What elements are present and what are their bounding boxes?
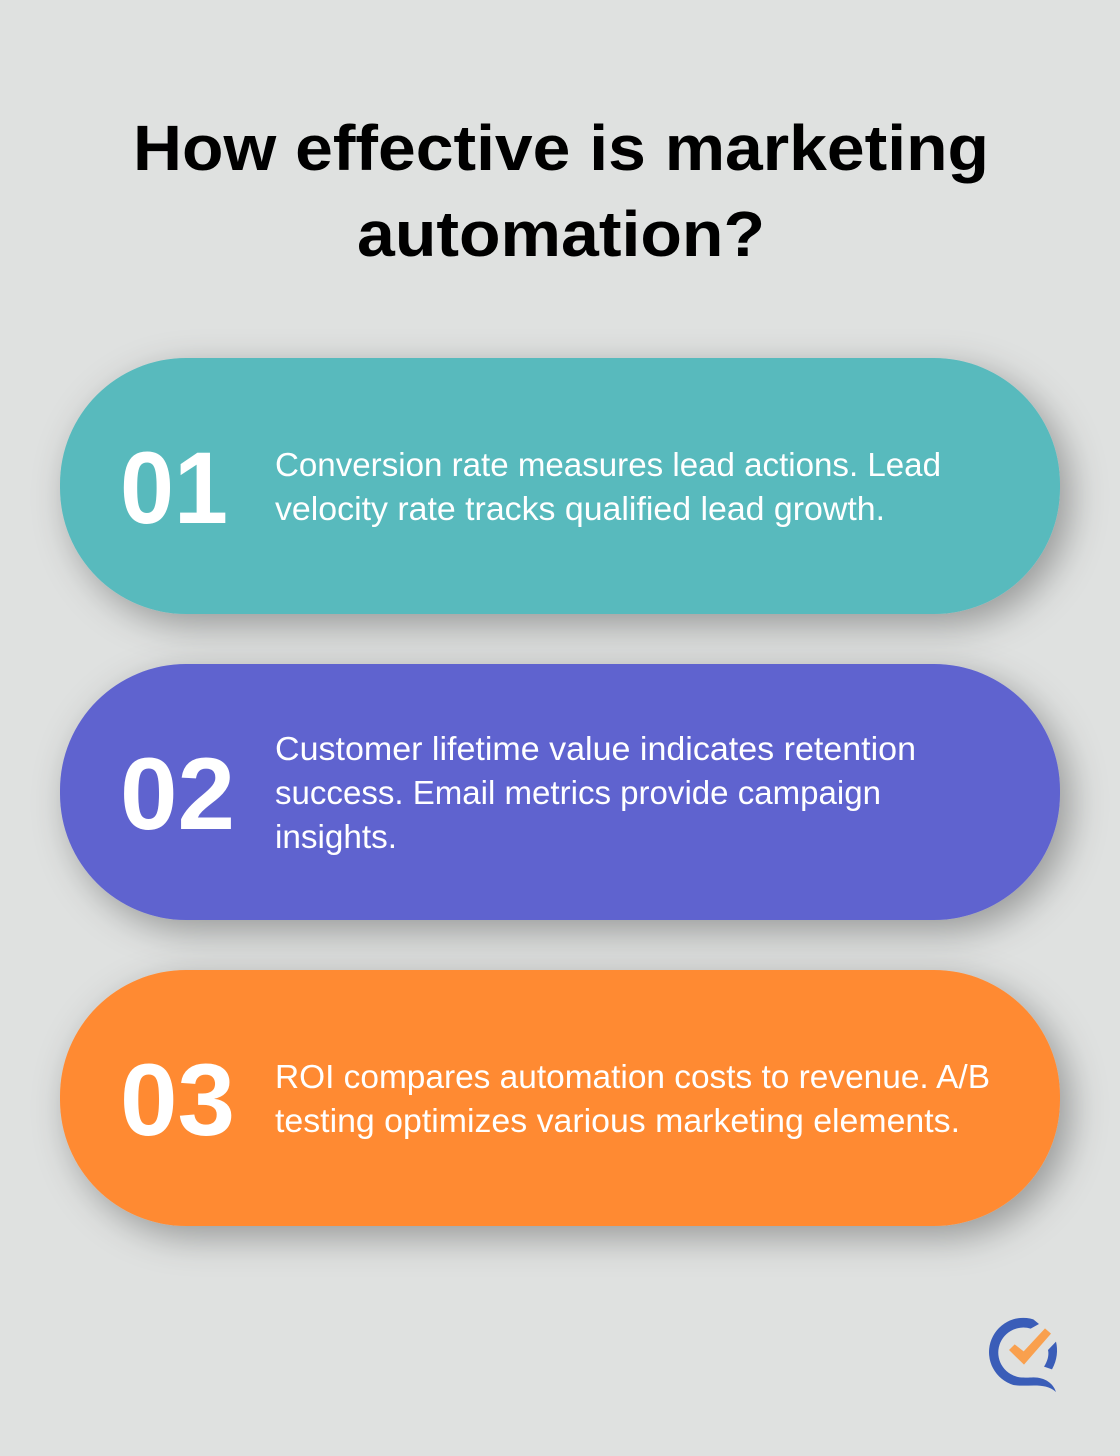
text: step 01 description: Conversion rate measures lead actions. Lead [275,446,941,483]
text: step 03 description [275,1058,990,1139]
teal pill background [60,358,1060,614]
indigo pill background [60,664,1060,920]
text: step 02 description [275,730,916,855]
orange pill background [60,970,1060,1226]
text: step 03 description: testing optimizes various marketing elements. [275,1102,960,1139]
icon: logo speech bubble with check mark [989,1318,1057,1392]
title [133,112,989,270]
title: How effective is marketing [133,112,989,184]
title: automation? [357,198,765,270]
panel: step 03 [60,970,1060,1226]
text: step 02 description: insights. [275,818,397,855]
number 03: 03 [120,1043,235,1157]
text: step 03 description: ROI compares automation costs to revenue. A/B [275,1058,990,1095]
number 01: 01 [120,431,228,545]
text: step 02 description: success. Email metrics provide campaign [275,774,881,811]
panel: step 02 [60,664,1060,920]
text: step 02 description: Customer lifetime value indicates retention [275,730,916,767]
number 02: 02 [120,737,235,851]
panel: step 01 [60,358,1060,614]
text: step 01 description: velocity rate tracks qualified lead growth. [275,490,885,527]
text: step 01 description [275,446,941,527]
